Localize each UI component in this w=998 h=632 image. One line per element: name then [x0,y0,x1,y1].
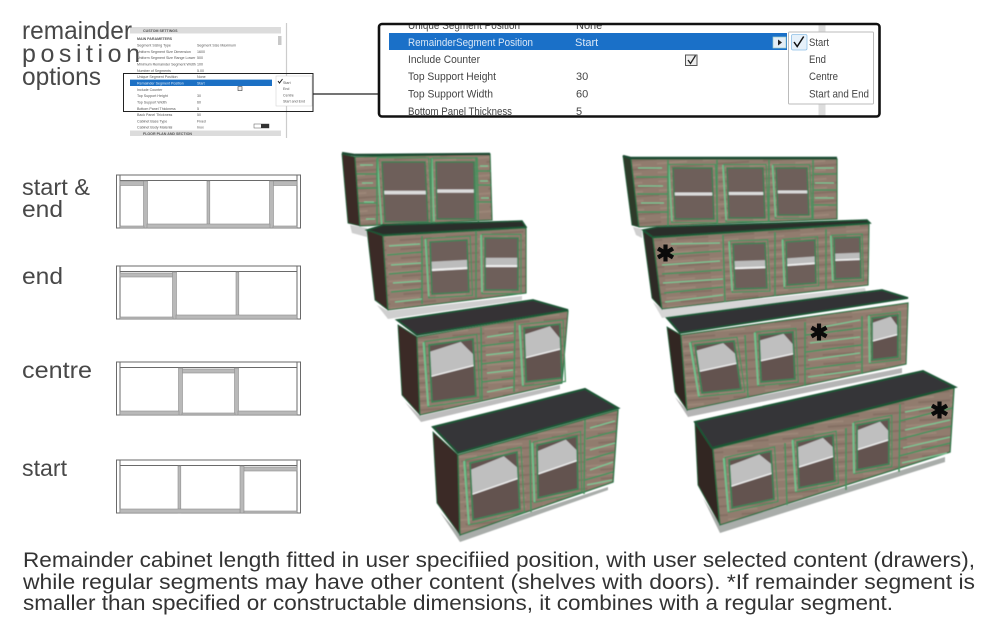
panel: enlarged settings callout: 5 [576,106,582,118]
label: start & end: start & [22,174,90,200]
panel: small settings screenshot: 5.00 [197,69,204,73]
connector line [313,93,378,95]
panel: small settings screenshot: CUSTOM SETTINGS [143,29,178,33]
panel: small settings screenshot: MAIN PARAMETERS [137,37,173,41]
cabinet: left column third unit [397,300,568,422]
panel: small settings screenshot: Uniform Segment Size Dimension [137,50,191,54]
cabinet: right column third unit [667,290,908,417]
label: centre: centre [22,357,92,383]
caption text [22,548,975,615]
panel: small settings screenshot: FLOOR PLAN AND SECTION [143,132,192,136]
small highlight frame [124,74,313,112]
panel: small settings screenshot: Segment Sizing Type [137,44,171,48]
panel: enlarged settings callout: Include Counter [408,54,480,66]
drawers [387,231,476,304]
callout frame [379,24,880,116]
panel: enlarged settings callout: Bottom Panel Thickness [408,106,512,118]
panel: small settings screenshot: Fixed [197,119,206,123]
dropdown menu [788,32,874,104]
small dropdown menu: End [283,87,289,91]
panel: enlarged settings callout: 30 [576,71,588,83]
panel: small settings screenshot: Remainder Segment Position [137,81,184,85]
checkbox [686,55,697,66]
panel: small settings screenshot: Include Counter [137,88,163,92]
panel: enlarged settings callout [379,20,880,118]
dropdown arrow button [773,37,786,48]
panel: enlarged settings callout: Top Support Width [408,88,493,100]
panel: small settings screenshot: Start [197,81,205,85]
drawers [785,404,952,505]
panel: small settings screenshot [124,23,313,138]
drawers [636,160,836,226]
icon: asterisk on bottom unit [932,402,947,418]
label: start & end [22,174,90,222]
door windows [464,431,582,525]
icon: asterisk on third unit [812,324,826,340]
elevation: start and end [116,175,300,228]
caption text: while regular segments may have other content (shelves with doors). *If remainder segment is [22,570,975,594]
cabinet: right column bottom unit [695,371,955,533]
panel: small settings screenshot: Bottom Panel Thickness [137,107,176,111]
panel: small settings screenshot: Cabinet Base Type [137,119,167,123]
panel: enlarged settings callout: 60 [576,88,588,100]
heading: remainder position options: options [22,63,101,91]
small dropdown menu: Start [283,81,291,85]
panel: small settings screenshot: 5 [197,107,199,111]
door windows [729,234,863,292]
door windows [425,234,521,298]
label: start & end: end [22,196,63,222]
drawers [661,229,826,302]
small dropdown menu: Centre [283,94,294,98]
door windows [690,312,900,397]
dropdown menu: Start [809,37,829,49]
panel: small settings screenshot: Number of Segments [137,69,171,73]
panel: small settings screenshot: Cabinet Body Material [137,126,173,130]
drawers [481,322,515,400]
door windows [669,164,812,223]
panel: small settings screenshot: Uniform Segment Size Range Lower [137,56,196,60]
panel: small settings screenshot: 60 [197,100,201,104]
label: start: start [22,455,68,481]
panel: small settings screenshot: Unique Segment Position [137,75,178,79]
cabinet: left column second unit [367,221,526,319]
small dropdown menu: Start and End [283,100,305,104]
cabinet: left column bottom unit [433,389,618,542]
cabinet: right column upper unit [623,156,837,238]
heading: remainder position options: position [22,40,140,68]
drawers [530,420,616,512]
caption text: Remainder cabinet length fitted in user specifiied position, with user selected content (drawers), [23,548,975,572]
caption text: smaller than specified or constructable dimensions, it combines with a regular segment. [23,591,893,615]
panel: enlarged settings callout: Unique Segment Position [408,20,520,32]
panel: small settings screenshot: Inox [197,126,204,130]
panel: small settings screenshot: Segment Size Maximum [197,44,236,48]
door windows [724,415,892,512]
label: end: end [22,263,63,289]
panel: small settings screenshot: Back Panel Thickness [137,113,172,117]
elevation: end [116,266,300,319]
panel: small settings screenshot: 30 [197,94,201,98]
dropdown menu: Centre [809,71,838,83]
panel: enlarged settings callout: None [576,20,602,32]
panel: enlarged settings callout: Top Support Height [408,71,496,83]
dropdown menu: Start and End [809,88,869,100]
small dropdown menu [276,76,312,106]
panel: small settings screenshot: Minimum Remainder Segment Width [137,62,196,66]
drawers [357,157,491,225]
heading: remainder position options: remainder [22,17,132,45]
panel: small settings screenshot: 100 [197,62,203,66]
elevation: start [116,460,300,513]
panel: small settings screenshot: Top Support Width [137,100,167,104]
panel: small settings screenshot: 500 [197,56,203,60]
panel: enlarged settings callout: Start [575,37,598,49]
dropdown menu: End [809,54,826,66]
drawers [745,316,862,398]
panel: small settings screenshot: Top Support Height [137,94,168,98]
cabinet: right column second unit [643,220,870,318]
panel: small settings screenshot: None [197,75,206,79]
cabinet: left column upper unit [342,153,492,237]
panel: small settings screenshot: 1600 [197,50,205,54]
door windows [377,158,478,226]
elevation: centre [116,362,300,415]
panel: small settings screenshot: 50 [197,113,201,117]
door windows [424,320,565,407]
heading: remainder position options [22,17,140,91]
icon: asterisk on second unit [658,244,673,262]
panel: enlarged settings callout: RemainderSegment Position [408,37,533,49]
